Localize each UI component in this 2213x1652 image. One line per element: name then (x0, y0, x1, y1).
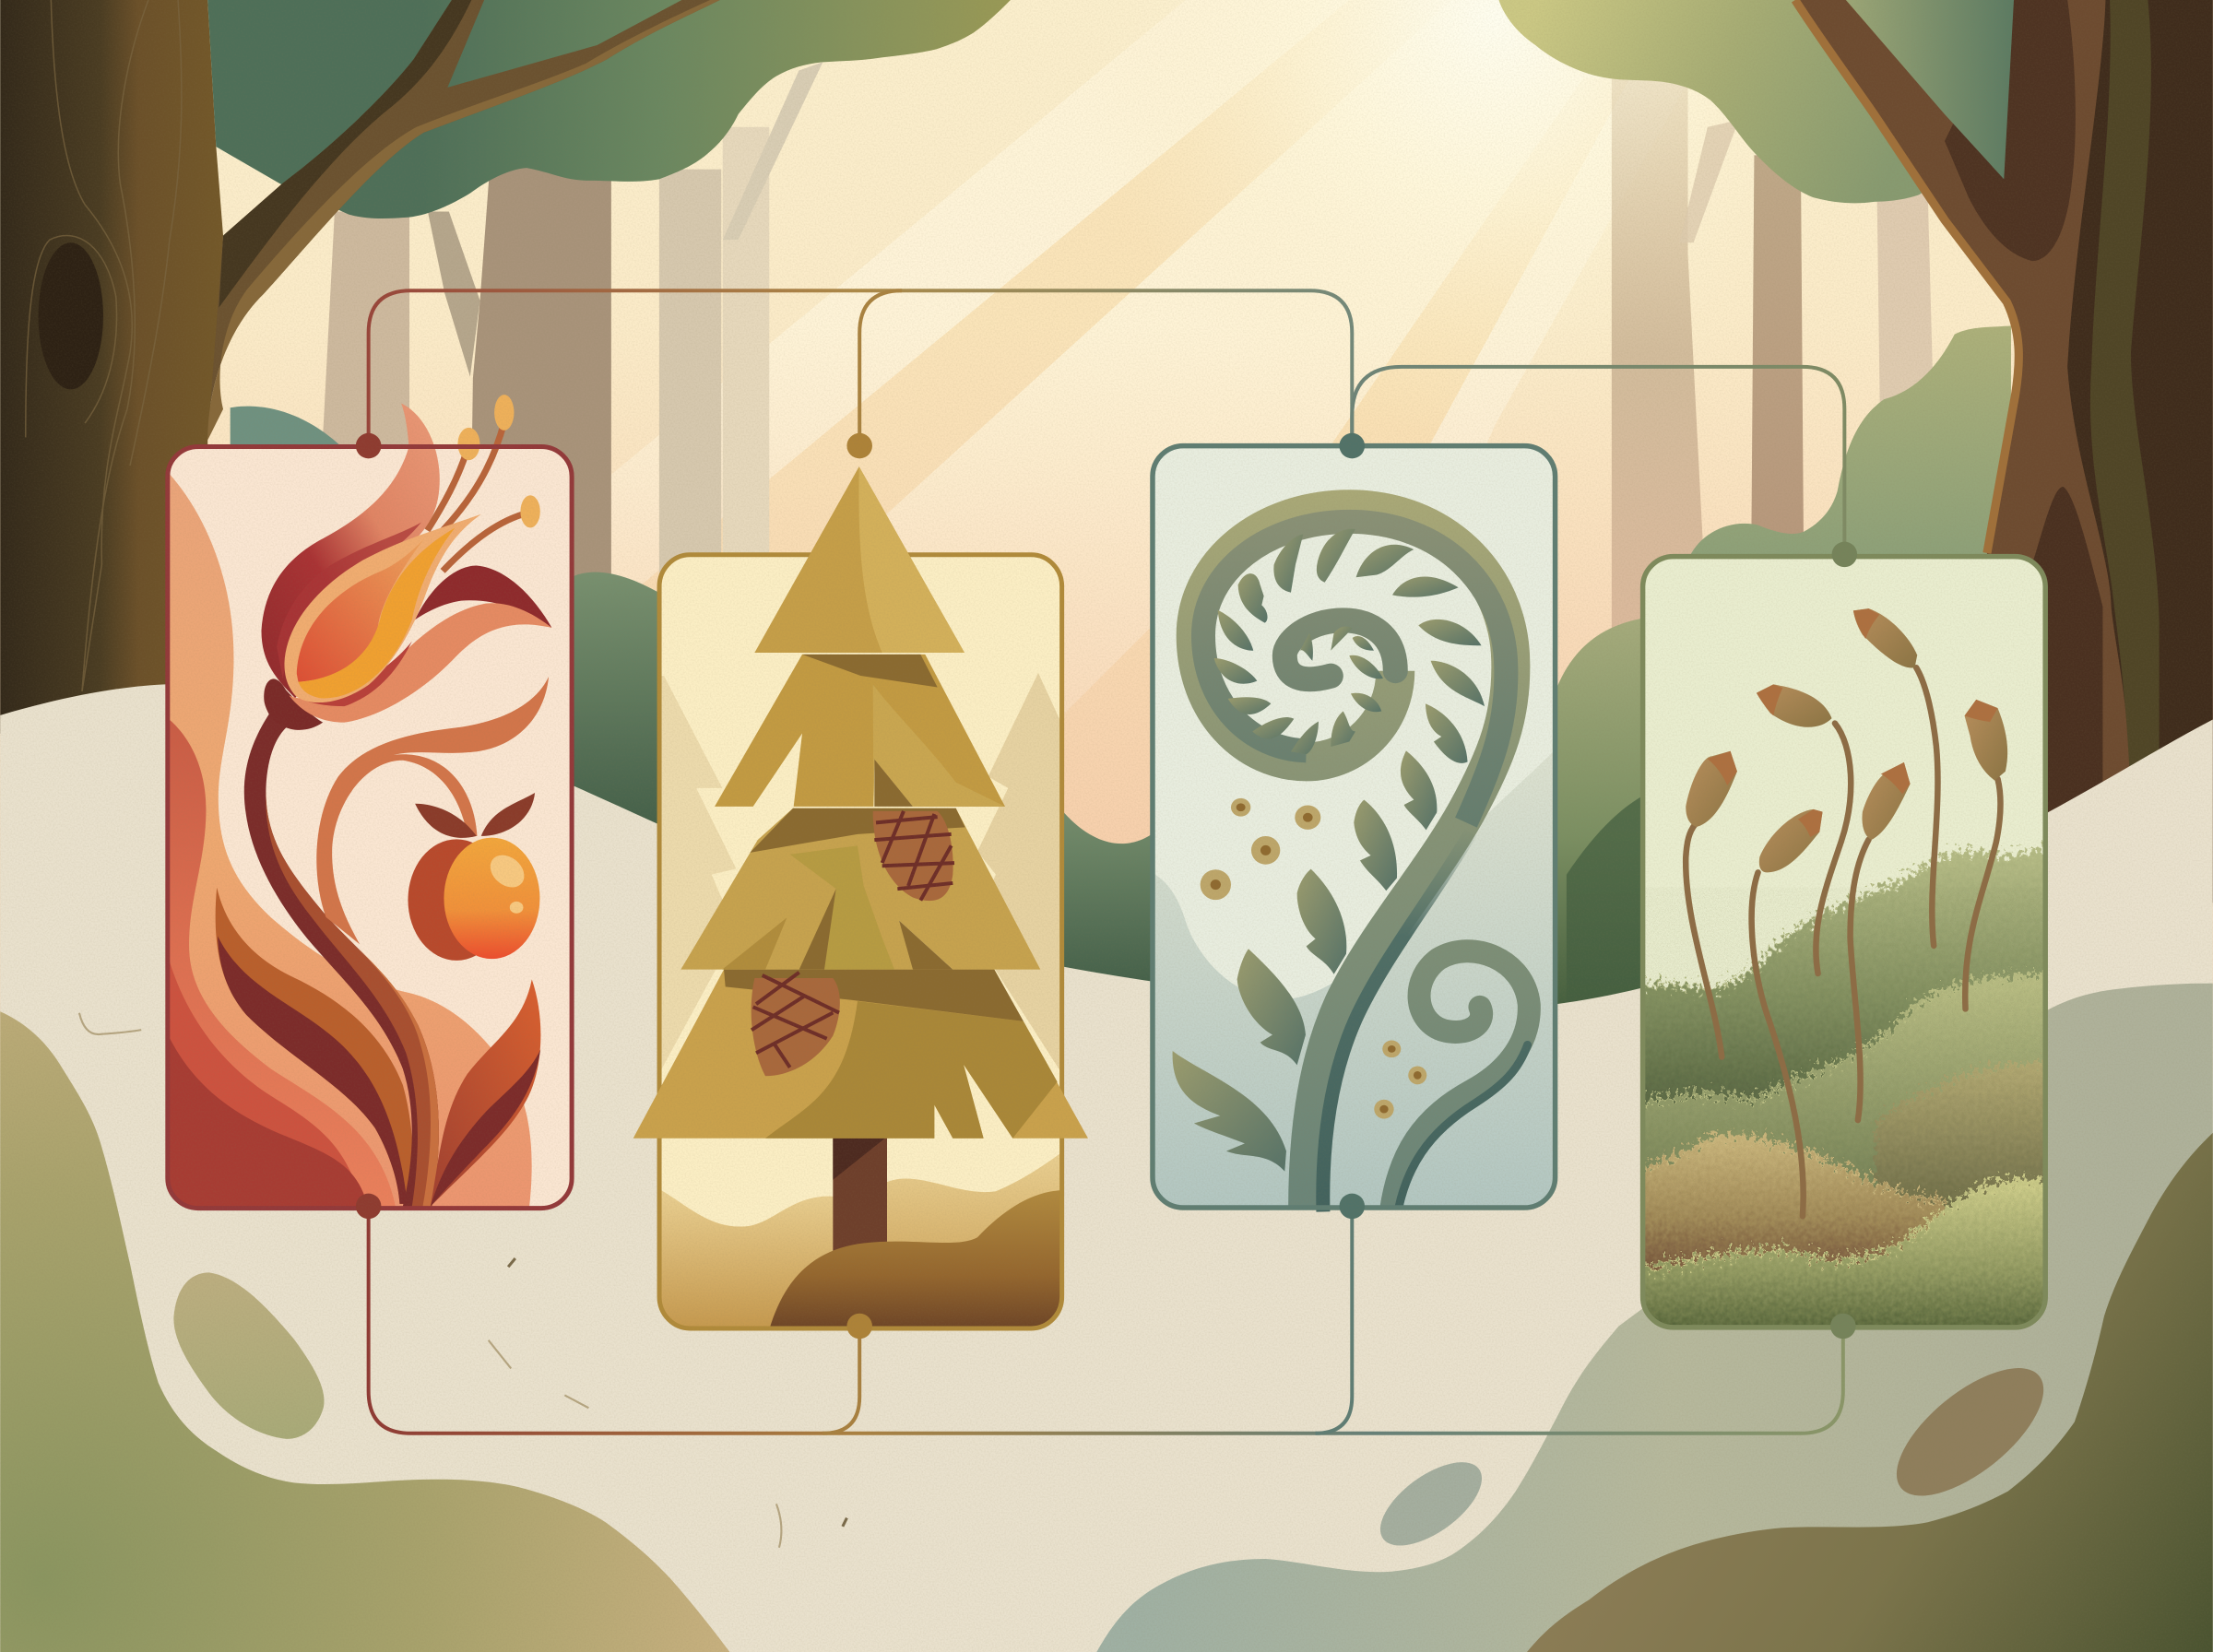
fern small curl (1390, 951, 1529, 1227)
connector: fern to moss (1352, 367, 1844, 554)
background: sun rays (332, 0, 1686, 903)
card 2 trunk (833, 1137, 887, 1260)
ground blob: tan oval (1876, 1345, 2064, 1518)
card 1 fruit (408, 838, 539, 961)
tree: middle tier (680, 808, 1040, 970)
tree: bottom tier (633, 970, 1088, 1139)
connector: fern down to bus (1315, 1208, 1352, 1434)
paper ground (0, 684, 2213, 1652)
moss capsule caps (1708, 608, 1998, 837)
right foreground tree (1795, 0, 2213, 903)
card 3 background (1153, 446, 1558, 1227)
card 2 scenery (657, 673, 1063, 1332)
moss layers (1635, 847, 2056, 1348)
card 1 flower (261, 404, 551, 730)
card 1 lower-right leaf (431, 979, 540, 1207)
connector lines (369, 290, 1844, 1434)
card 4: moss with capsules (1635, 557, 2056, 1348)
fern main stem and outer spiral base (1196, 509, 1510, 1227)
card 3: fern fiddlehead (1153, 446, 1558, 1227)
ground blob: sage oval (1367, 1446, 1496, 1562)
pine cone lower (751, 973, 840, 1076)
pine cone upper (873, 811, 954, 901)
card 1 fruit leaves (415, 793, 535, 838)
card 4 background (1643, 557, 2045, 1328)
card 2 border (659, 555, 1062, 1328)
card 1 background (168, 446, 572, 1209)
ground blob: small olive oval (173, 1272, 324, 1439)
background: distant trunks (322, 62, 1934, 678)
card 1 stamens (427, 395, 540, 571)
connector: tree to top line (859, 290, 902, 446)
ground blob: tan lower right (1527, 1133, 2213, 1652)
left canopy (207, 0, 1011, 218)
ground blob: sage lower right (1096, 984, 2213, 1652)
card 1 flowing background waves (166, 474, 532, 1212)
connector: bottom bus (369, 1208, 1843, 1434)
connector: top red to sage (369, 290, 1352, 446)
card 1 border (168, 446, 572, 1209)
fern leaflets (1173, 529, 1485, 1172)
fern spores (1201, 798, 1426, 1119)
moss capsules (1686, 608, 2007, 872)
background: sky (0, 0, 2213, 1072)
moss speckle (1643, 888, 2045, 1328)
card 1 lower-left leaf (216, 888, 414, 1204)
moss stalks (1686, 667, 2000, 1216)
fern inner spiral (1284, 620, 1395, 679)
card 3 border (1153, 446, 1556, 1208)
tree: upper tier (715, 655, 1005, 807)
tree: top tier (754, 466, 964, 653)
ground blob: olive lower left (0, 1011, 729, 1652)
card 1 main stem (244, 712, 439, 1207)
card 4 border (1643, 557, 2045, 1328)
card 2 background (659, 555, 1062, 1328)
right canopy dark section (1846, 0, 2014, 179)
connector: tree down to bus (822, 1328, 859, 1434)
card 1 curling stem (316, 677, 549, 944)
left foreground tree (0, 0, 223, 734)
card 2 hill (768, 1190, 1063, 1332)
card 1: flower and fruit (166, 395, 572, 1212)
card 2: conifer with cones (633, 466, 1088, 1332)
connector nodes (356, 433, 1857, 1339)
paper fibre specks (79, 1013, 846, 1548)
background: green hills behind cards (231, 326, 2011, 1016)
right canopy (1498, 0, 1976, 203)
left tree limbs (207, 0, 720, 440)
fern outer spiral inner shade (1203, 522, 1506, 822)
fern stem dark stripe (1323, 832, 1471, 1211)
